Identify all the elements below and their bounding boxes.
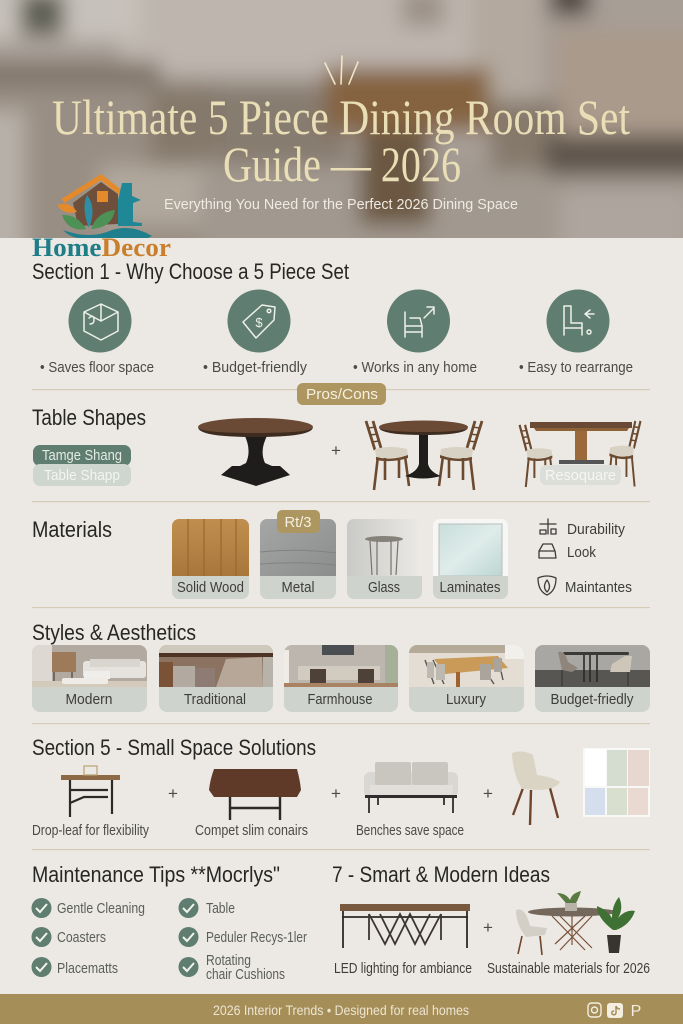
criteria list (538, 519, 632, 596)
tip: rotating chair cushions: Rotating (206, 953, 251, 969)
style card: budget-friendly: Budget-friedly (550, 691, 634, 708)
tip: gentle cleaning: Gentle Cleaning (57, 901, 145, 917)
subtitle: Everything You Need for the Perfect 2026 Dining Space (164, 196, 518, 213)
section: table shapes (32, 405, 641, 490)
tip: coasters (32, 927, 106, 947)
idea captions: LED lighting for ambiance (334, 961, 472, 977)
tip: placematts (32, 957, 118, 977)
benefit labels: • Easy to rearrange (519, 359, 633, 376)
solution captions (32, 823, 464, 839)
heading: Table Shapes (32, 405, 146, 430)
icon: look (539, 544, 556, 558)
tip: rotating chair cushions: chair Cushions (206, 967, 285, 983)
square table with two chairs (520, 421, 641, 487)
icon: works in any home (387, 290, 450, 352)
benefit labels: • Budget-friendly (203, 359, 307, 376)
icon: easy to rearrange (546, 290, 610, 352)
badge: rt/3: Rt/3 (284, 514, 312, 531)
sunburst ornament (325, 56, 358, 84)
section: materials (32, 510, 632, 599)
tip: table: Table (206, 901, 235, 917)
section 7: smart and modern ideas (332, 862, 650, 977)
heading: 7 - Smart & Modern Ideas (332, 862, 550, 887)
floor plant (597, 897, 635, 930)
tip: peduler recys-1ler (178, 927, 307, 947)
idea captions: Sustainable materials for 2026 (487, 961, 650, 977)
icon: tiktok (607, 1003, 623, 1018)
icon: budget tag: $ (255, 315, 263, 330)
style card: farmhouse: Farmhouse (308, 691, 372, 708)
criteria list: Durability (567, 521, 625, 538)
drop-leaf table (209, 769, 301, 820)
benefit labels (40, 359, 633, 376)
plus sign: + (331, 441, 341, 460)
plus sign: + (483, 918, 493, 937)
icon: pinterest: P (631, 1003, 641, 1020)
icon: budget tag (228, 290, 290, 352)
style card: luxury (409, 645, 524, 712)
material card: metal: Metal (282, 579, 314, 596)
tip: rotating chair cushions (178, 953, 285, 983)
heading: Styles & Aesthetics (32, 620, 196, 645)
benefit labels: • Works in any home (353, 359, 477, 376)
material card: laminates: Laminates (440, 579, 500, 596)
footer bar (0, 994, 683, 1024)
tip: placematts: Placematts (57, 961, 118, 977)
shape pills (33, 445, 131, 486)
shape pills: Tamge Shang (42, 447, 122, 464)
icon: instagram (588, 1003, 601, 1017)
square table label: Resoquare (545, 467, 616, 484)
material card: solid wood: Solid Wood (177, 579, 244, 596)
plus sign: + (168, 784, 178, 803)
section 5: small space solutions (32, 735, 650, 839)
style card: modern: Modern (66, 691, 112, 708)
criteria list: Look (567, 544, 596, 561)
dining chair (516, 909, 547, 937)
blurred room photo (0, 0, 683, 238)
footer text: 2026 Interior Trends • Designed for real homes (213, 1002, 469, 1018)
benefit labels: • Saves floor space (40, 359, 154, 376)
icon: maintenance (538, 576, 556, 595)
round table with plant and chair (516, 891, 635, 955)
icon: durability (540, 519, 556, 534)
title: Guide — 2026 (223, 136, 461, 192)
style card: luxury: Luxury (446, 691, 486, 708)
section: maintenance tips (32, 862, 307, 983)
upholstered side chair (512, 751, 560, 825)
centre plant (557, 891, 581, 908)
style card: traditional (159, 645, 273, 712)
style card: modern (32, 645, 147, 712)
heading: Section 5 - Small Space Solutions (32, 735, 316, 760)
badge: pros/cons: Pros/Cons (306, 386, 378, 403)
criteria list: Maintantes (565, 579, 632, 596)
heading: Maintenance Tips **Mocrlys" (32, 862, 280, 887)
material card: metal (260, 519, 336, 599)
badge: pros/cons (297, 383, 386, 405)
icon: saves floor space (68, 290, 132, 352)
material card: glass (347, 519, 422, 599)
title (52, 89, 630, 192)
shape pills: Table Shapp (44, 467, 120, 484)
plus sign: + (331, 784, 341, 803)
style card: budget-friendly (535, 645, 650, 712)
idea captions (334, 961, 650, 977)
heading: Materials (32, 517, 112, 542)
tip: coasters: Coasters (57, 930, 106, 946)
colour swatches (583, 748, 650, 817)
section 1: why choose a 5 piece set (32, 259, 633, 376)
drop-leaf desk (61, 766, 120, 817)
tip: gentle cleaning (32, 898, 145, 918)
material card: solid wood (172, 519, 249, 599)
two-seat bench sofa (364, 762, 458, 813)
style card: farmhouse (284, 645, 398, 712)
logo house icon (57, 177, 152, 238)
logo: HomeDecor (32, 177, 171, 262)
round table with two chairs (366, 420, 482, 490)
style card: traditional: Traditional (184, 691, 246, 708)
material card: glass: Glass (368, 579, 400, 596)
badge: rt/3 (277, 510, 320, 533)
logo wordmark: HomeDecor (32, 233, 171, 262)
solution captions: Drop-leaf for flexibility (32, 823, 150, 839)
plus sign: + (483, 784, 493, 803)
round pedestal table (198, 418, 313, 486)
table top (528, 908, 616, 916)
long table with lattice base (340, 904, 470, 948)
tip: table (178, 898, 235, 918)
heading: Section 1 - Why Choose a 5 Piece Set (32, 259, 349, 284)
section: styles and aesthetics (32, 620, 650, 712)
hero banner (0, 0, 683, 238)
material card: laminates (433, 519, 508, 599)
solution captions: Benches save space (356, 823, 464, 839)
solution captions: Compet slim conairs (195, 823, 308, 839)
tip: peduler recys-1ler: Peduler Recys-1ler (206, 930, 307, 946)
